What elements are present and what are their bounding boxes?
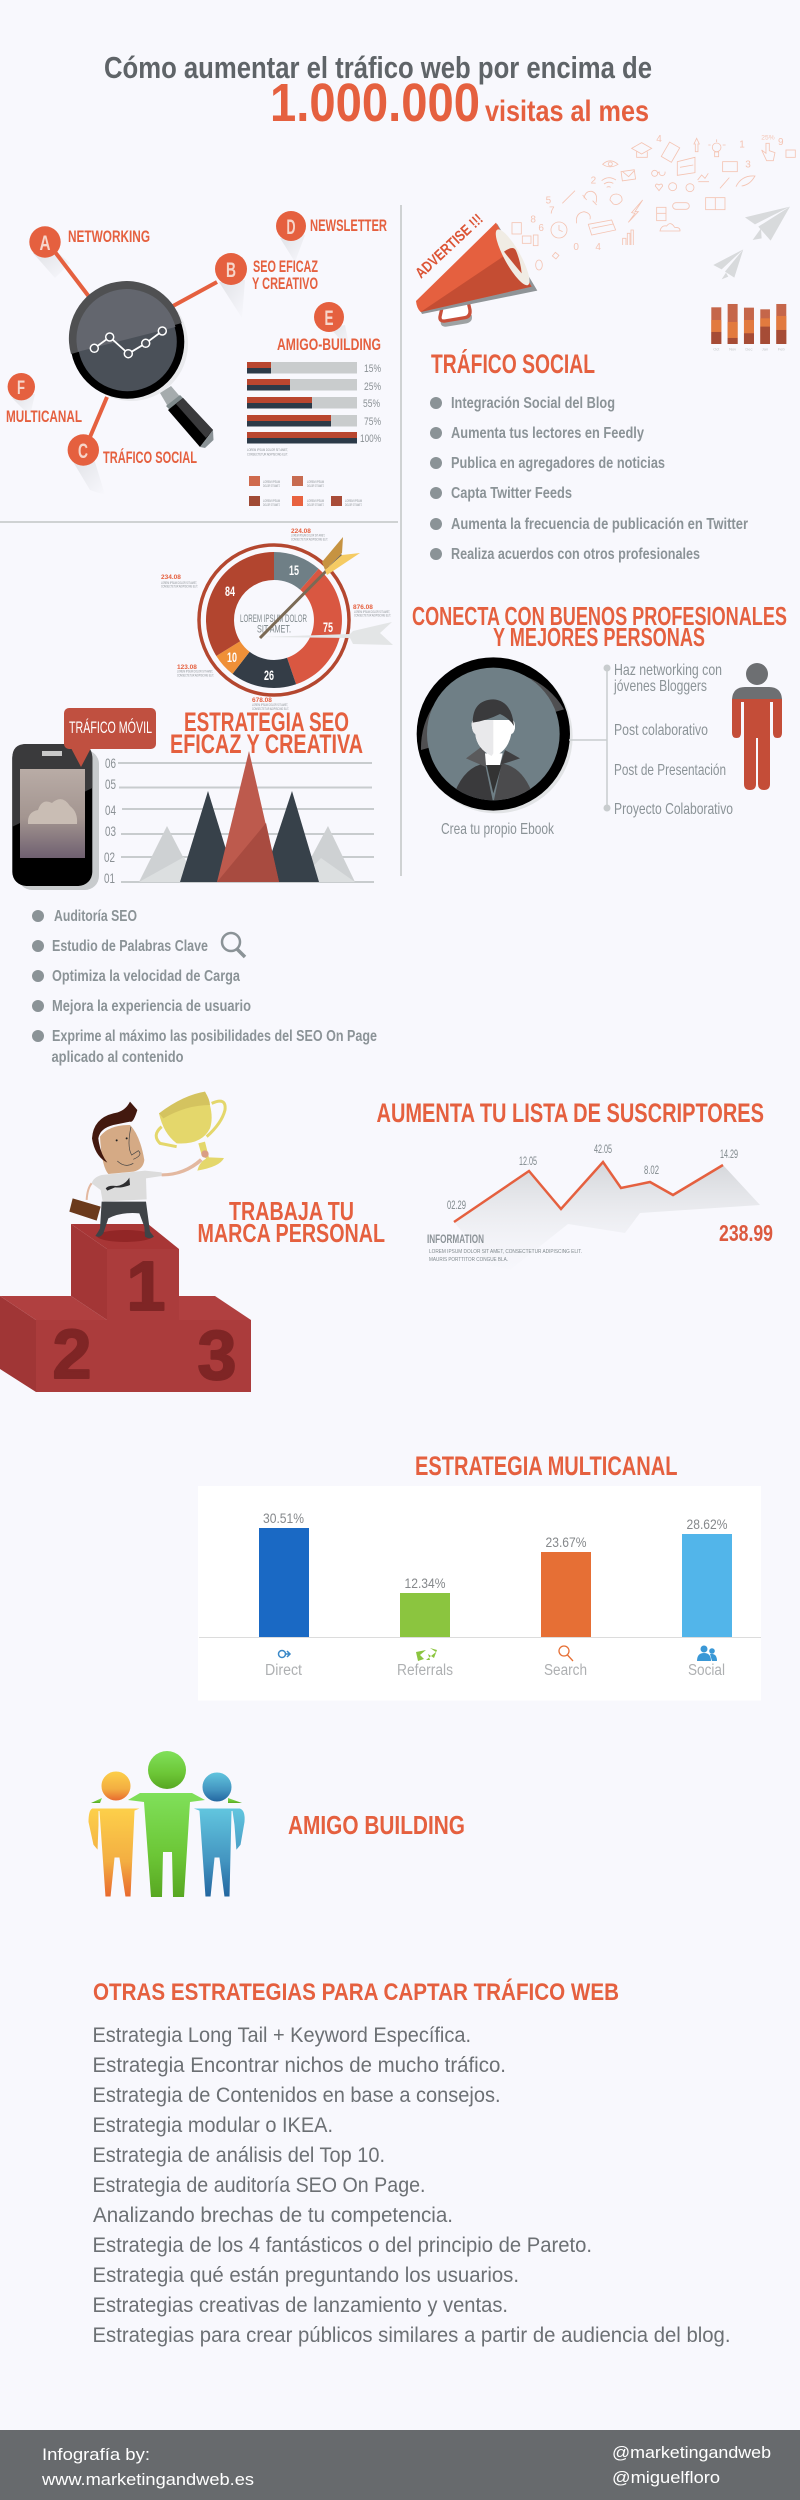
heading: tráfico social: TRÁFICO SOCIAL xyxy=(431,348,595,379)
progress bars xyxy=(247,362,381,456)
donut chart: CONSECTETUR ADIPISCING ELIT. xyxy=(177,672,214,678)
icon: search xyxy=(222,933,245,957)
heading: estrategia seo: EFICAZ Y CREATIVA xyxy=(170,729,363,759)
list: seo: Estudio de Palabras Clave xyxy=(52,938,208,955)
progress bars: CONSECTETUR ADIPISCING ELIT. xyxy=(247,452,288,456)
heading: amigo building: AMIGO BUILDING xyxy=(288,1810,465,1840)
doodle cloud: 0 xyxy=(573,242,579,253)
stacked bar chart: Jan xyxy=(762,347,768,352)
donut chart: LOREM IPSUM DOLOR SIT AMET, xyxy=(161,580,197,585)
list: tráfico social xyxy=(430,395,748,563)
stacked bar chart: Nov xyxy=(729,347,736,352)
podium: 1 xyxy=(127,1247,165,1325)
line chart: 12.05 xyxy=(519,1154,537,1168)
list: otras estrategias: Estrategia modular o IKEA. xyxy=(92,2114,333,2137)
marker A xyxy=(29,226,61,258)
donut chart: 75 xyxy=(323,619,333,635)
legend squares: DOLOR SIT AMET. xyxy=(307,502,324,507)
list: otras estrategias: Estrategia qué están preguntando los usuarios. xyxy=(92,2264,519,2287)
line chart: MAURIS PORTTITOR CONGUE BLA. xyxy=(429,1257,508,1263)
list: otras estrategias: Estrategia Encontrar nichos de mucho tráfico. xyxy=(92,2054,506,2077)
donut chart: CONSECTETUR ADIPISCING ELIT. xyxy=(252,706,289,711)
legend squares: DOLOR SIT AMET. xyxy=(263,483,280,488)
line chart: 238.99 xyxy=(719,1220,773,1246)
line chart: LOREM IPSUM DOLOR SIT AMET, CONSECTETUR ADIPISCING ELIT. xyxy=(429,1249,582,1255)
donut chart: LOREM IPSUM DOLOR SIT AMET, xyxy=(354,609,390,614)
donut chart: 678.08 xyxy=(252,697,272,704)
donut chart: 234.08 xyxy=(161,574,181,581)
doodle cloud: 2 xyxy=(591,175,597,186)
heading: multicanal: ESTRATEGIA MULTICANAL xyxy=(415,1451,678,1481)
footer: Infografía by: xyxy=(42,2445,150,2464)
legend squares: LOREM IPSUM xyxy=(263,479,280,484)
heading: marca personal xyxy=(198,1196,385,1248)
infographic canvas: DOLOR SIT AMET. xyxy=(345,502,362,507)
footer: @miguelfloro xyxy=(612,2468,720,2487)
footer: www.marketingandweb.es xyxy=(41,2470,254,2489)
legend squares xyxy=(249,476,362,507)
marker D: D xyxy=(286,216,296,239)
donut chart: SIT AMET. xyxy=(257,624,291,636)
marker E xyxy=(314,302,344,332)
marker labels: MULTICANAL xyxy=(6,407,82,426)
doodle cloud: 9 xyxy=(778,137,784,148)
marker D xyxy=(276,211,306,241)
doodle cloud: 4 xyxy=(656,134,662,145)
marker F xyxy=(8,373,35,400)
legend squares: DOLOR SIT AMET. xyxy=(263,502,280,507)
illustration: businessman with trophy xyxy=(69,1092,225,1238)
list: otras estrategias: Estrategia de los 4 fantásticos o del principio de Pareto. xyxy=(92,2234,592,2257)
donut chart: 26 xyxy=(264,667,274,683)
title: Cómo aumentar el tráfico web por encima de xyxy=(104,50,652,85)
bar chart: multicanal: Direct xyxy=(265,1662,303,1679)
legend squares: LOREM IPSUM xyxy=(263,498,280,503)
list: tráfico social: Publica en agregadores de noticias xyxy=(451,455,665,472)
list: otras estrategias: Estrategias para crear públicos similares a partir de audiencia del blog. xyxy=(92,2324,730,2347)
connector list: Post de Presentación xyxy=(614,762,726,779)
heading: conecta: Y MEJORES PERSONAS xyxy=(493,622,705,652)
heading: marca personal: TRABAJA TU xyxy=(229,1196,354,1226)
list: seo: Optimiza la velocidad de Carga xyxy=(52,968,240,985)
donut chart: LOREM IPSUM DOLOR SIT AMET, xyxy=(291,532,325,538)
line chart: 8.02 xyxy=(644,1163,659,1177)
dividers xyxy=(0,205,402,876)
marker A: A xyxy=(40,232,50,255)
bar chart: multicanal: 28.62% xyxy=(686,1517,728,1532)
podium: 2 xyxy=(53,1315,91,1393)
podium xyxy=(0,1224,251,1394)
figure: green xyxy=(91,1751,242,1897)
legend squares: DOLOR SIT AMET. xyxy=(307,483,324,488)
line chart: 02.29 xyxy=(447,1198,466,1212)
figure: yellow xyxy=(88,1771,142,1897)
connector list: Post colaborativo xyxy=(614,722,708,739)
list: seo: Mejora la experiencia de usuario xyxy=(52,998,251,1015)
doodle cloud xyxy=(512,134,795,270)
stacked bar chart: Feb xyxy=(778,347,786,352)
icon: magnifying glass xyxy=(69,281,214,448)
heading: otras estrategias: OTRAS ESTRATEGIAS PARA CAPTAR TRÁFICO WEB xyxy=(93,1978,619,2006)
line chart: 42.05 xyxy=(594,1142,612,1156)
triangle chart: 03 xyxy=(105,823,116,839)
callout: tráfico móvil: TRÁFICO MÓVIL xyxy=(69,718,152,737)
heading: marca personal: MARCA PERSONAL xyxy=(198,1218,385,1248)
list: otras estrategias: Estrategia de auditoría SEO On Page. xyxy=(92,2174,426,2197)
marker E: E xyxy=(324,307,334,330)
donut chart: 123.08 xyxy=(177,664,197,671)
footer: @marketingandweb xyxy=(612,2443,771,2462)
list: seo xyxy=(32,908,377,1066)
stacked bar chart: Dec xyxy=(745,347,753,352)
podium: 3 xyxy=(198,1316,236,1394)
heading: estrategia seo: ESTRATEGIA SEO xyxy=(184,707,349,737)
legend squares: LOREM IPSUM xyxy=(345,498,362,503)
icon: group of friends xyxy=(88,1751,245,1897)
stacked bar chart: Oct xyxy=(713,347,720,352)
bar chart: multicanal: 23.67% xyxy=(546,1535,586,1550)
marker labels: AMIGO-BUILDING xyxy=(277,335,381,354)
title: visitas al mes xyxy=(485,95,649,128)
triangle chart: 04 xyxy=(105,802,116,818)
donut chart: LOREM IPSUM DOLOR xyxy=(240,613,307,625)
bar chart: multicanal: Social xyxy=(688,1662,725,1679)
donut chart xyxy=(161,528,393,711)
doodle cloud: 1 xyxy=(739,139,745,150)
marker C: C xyxy=(78,440,88,463)
progress bars: LOREM IPSUM DOLOR SIT AMET, xyxy=(247,447,288,452)
connector list: Haz networking con xyxy=(614,662,722,679)
list: otras estrategias: Estrategia Long Tail + Keyword Específica. xyxy=(92,2024,471,2047)
triangle chart: 01 xyxy=(104,870,115,886)
figure: blue xyxy=(191,1772,245,1897)
progress bars: 25% xyxy=(364,381,381,393)
donut chart: 10 xyxy=(227,649,237,665)
bar chart: multicanal: Search xyxy=(544,1662,587,1679)
icon: search small xyxy=(559,1646,573,1661)
icon: referrals xyxy=(416,1648,437,1661)
list: otras estrategias: Analizando brechas de tu competencia. xyxy=(93,2204,453,2227)
caption: ebook: Crea tu propio Ebook xyxy=(441,821,555,838)
list: seo: Auditoría SEO xyxy=(54,908,137,925)
donut chart: 224.08 xyxy=(291,528,311,535)
line chart: 14.29 xyxy=(720,1147,738,1161)
stacked bar chart xyxy=(711,304,786,352)
doodle cloud: 3 xyxy=(745,160,751,171)
donut chart: 876.08 xyxy=(353,604,373,611)
marker B xyxy=(215,253,247,285)
donut chart: CONSECTETUR ADIPISCING ELIT. xyxy=(161,584,198,588)
list: tráfico social: Capta Twitter Feeds xyxy=(451,485,572,502)
callout: tráfico móvil xyxy=(64,708,156,767)
marker labels: NETWORKING xyxy=(68,227,150,246)
donut chart: 84 xyxy=(225,583,235,599)
doodle cloud: 8 xyxy=(530,214,536,225)
marker B: B xyxy=(226,259,236,282)
connector list: jóvenes Bloggers xyxy=(613,678,707,695)
triangle chart: 02 xyxy=(104,849,115,865)
progress bars: 100% xyxy=(360,433,381,445)
bar chart: multicanal xyxy=(198,1486,761,1700)
doodle cloud: 4 xyxy=(595,242,601,253)
avatar xyxy=(417,657,573,813)
icon: direct xyxy=(278,1650,290,1658)
triangle chart: 05 xyxy=(105,776,116,792)
triangle chart xyxy=(104,751,374,886)
icon: megaphone xyxy=(416,223,537,327)
donut chart: CONSECTETUR ADIPISCING ELIT. xyxy=(291,536,328,542)
advertise label: ADVERTISE !!! xyxy=(412,211,487,282)
magnifier diagram xyxy=(6,211,387,495)
title: 1.000.000 xyxy=(270,73,480,133)
marker labels: TRÁFICO SOCIAL xyxy=(103,448,197,467)
list: seo: aplicado al contenido xyxy=(52,1049,184,1066)
connector list: Proyecto Colaborativo xyxy=(614,801,733,818)
donut chart: 15 xyxy=(289,562,299,578)
icon: social xyxy=(697,1646,717,1661)
line chart: INFORMATION xyxy=(427,1232,484,1246)
doodle cloud: 5 xyxy=(546,195,552,206)
list: tráfico social: Integración Social del Blog xyxy=(451,395,615,412)
triangle chart: 06 xyxy=(105,755,116,771)
doodle cloud: 25% xyxy=(761,134,775,141)
heading: conecta xyxy=(412,601,787,652)
list: otras estrategias xyxy=(92,2024,730,2347)
icon: phone xyxy=(12,744,99,890)
donut chart: LOREM IPSUM DOLOR SIT AMET, xyxy=(177,668,213,674)
footer xyxy=(0,2430,800,2500)
bar chart: multicanal: 12.34% xyxy=(404,1576,446,1591)
bar chart: multicanal: Referrals xyxy=(397,1662,453,1679)
connector list xyxy=(569,662,733,818)
list: otras estrategias: Estrategia de análisis del Top 10. xyxy=(92,2144,385,2167)
icon: paper planes xyxy=(713,207,790,279)
doodle cloud: 7 xyxy=(549,205,555,216)
progress bars: 75% xyxy=(364,416,381,428)
list: tráfico social: Aumenta tus lectores en Feedly xyxy=(451,425,644,442)
marker labels: Y CREATIVO xyxy=(252,274,318,293)
title xyxy=(104,50,652,133)
marker labels xyxy=(6,216,387,467)
bar chart: multicanal: 30.51% xyxy=(263,1511,304,1526)
icon: person xyxy=(732,663,782,790)
list: otras estrategias: Estrategias creativas de lanzamiento y ventas. xyxy=(92,2294,508,2317)
marker F: F xyxy=(17,378,25,399)
donut chart: CONSECTETUR ADIPISCING ELIT. xyxy=(354,612,391,618)
list: otras estrategias: Estrategia de Contenidos en base a consejos. xyxy=(92,2084,500,2107)
marker labels: NEWSLETTER xyxy=(310,216,387,235)
donut chart: LOREM IPSUM DOLOR SIT AMET, xyxy=(252,702,288,707)
heading: estrategia seo xyxy=(170,707,363,759)
doodle cloud: 6 xyxy=(538,223,544,234)
marker labels: SEO EFICAZ xyxy=(253,257,318,276)
progress bars: 55% xyxy=(363,398,380,410)
list: tráfico social: Realiza acuerdos con otros profesionales xyxy=(451,546,700,563)
progress bars: 15% xyxy=(364,363,381,375)
legend squares: LOREM IPSUM xyxy=(307,498,324,503)
legend squares: LOREM IPSUM xyxy=(307,479,324,484)
list: seo: Exprime al máximo las posibilidades del SEO On Page xyxy=(52,1028,377,1045)
marker C xyxy=(68,434,99,466)
line chart xyxy=(427,1142,773,1270)
